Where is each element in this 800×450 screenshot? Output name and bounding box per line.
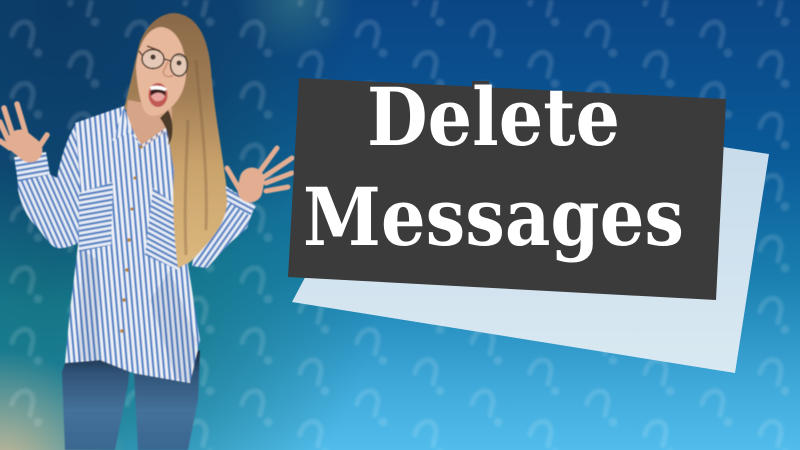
shirt fold shading <box>78 250 196 383</box>
left cuff <box>14 152 50 182</box>
left sleeve <box>17 124 82 248</box>
title: Delete Messages <box>303 70 684 264</box>
nose <box>163 62 173 77</box>
eyebrows <box>147 46 186 57</box>
dark hair under jaw <box>160 110 172 145</box>
right pocket <box>145 188 180 271</box>
buttons <box>120 145 143 333</box>
right hand <box>227 148 292 192</box>
face <box>136 27 186 116</box>
shirt body <box>65 106 200 383</box>
hair back <box>124 13 228 268</box>
hair front <box>138 18 227 268</box>
eyes <box>150 54 182 66</box>
collar <box>112 107 178 150</box>
jeans <box>62 350 200 450</box>
left pocket <box>79 182 113 252</box>
right cuff <box>222 187 256 216</box>
light note panel <box>292 98 769 373</box>
photo: surprised woman <box>0 13 292 450</box>
neck <box>125 100 172 150</box>
hair strands <box>185 60 206 255</box>
mouth <box>148 83 168 107</box>
right sleeve <box>192 186 255 268</box>
title: Delete Messages: Messages <box>303 170 684 264</box>
title: Delete Messages: Delete <box>367 70 620 164</box>
dark title panel <box>288 78 726 300</box>
left hand <box>0 104 47 150</box>
glasses <box>139 50 188 76</box>
l ascender tab <box>472 81 489 87</box>
